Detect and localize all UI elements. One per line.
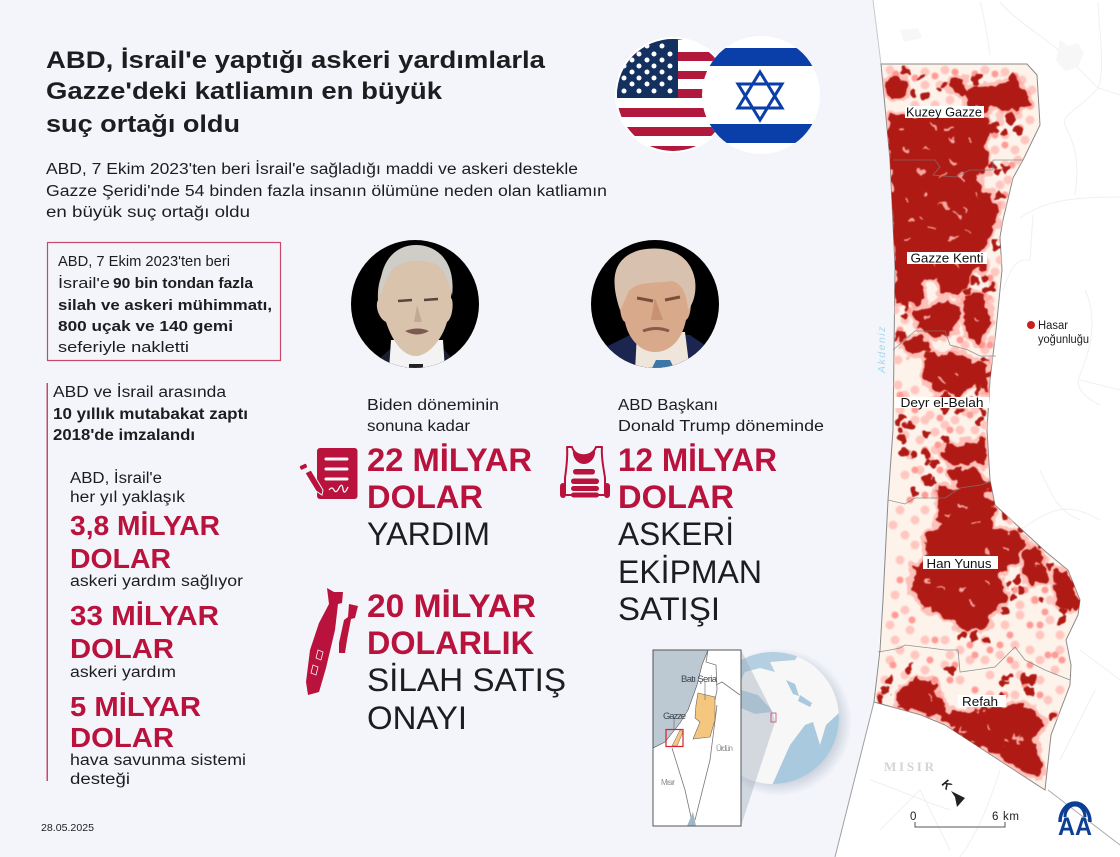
callout box: shipments: 90 bin tondan fazla bbox=[113, 275, 254, 292]
icon: bombs bbox=[306, 588, 358, 695]
locator: globe and inset map: Mısır bbox=[661, 778, 675, 787]
sales figure: 12 billion bbox=[618, 442, 777, 627]
annual aid: 3,8 MİLYAR bbox=[70, 510, 220, 541]
Trump caption bbox=[618, 397, 824, 435]
sales figure: 12 billion: EKİPMAN bbox=[618, 554, 762, 590]
sales figure: 20 billion: DOLARLIK bbox=[367, 625, 534, 661]
label: Akdeniz: Akdeniz bbox=[876, 325, 888, 374]
aid figure: 22 billion bbox=[367, 442, 532, 552]
sales figure: 12 billion: 12 MİLYAR bbox=[618, 442, 777, 478]
damage layer clipped to Gaza bbox=[880, 70, 1077, 774]
total aid bbox=[70, 600, 219, 681]
aid figure: 22 billion: YARDIM bbox=[367, 516, 490, 552]
callout box: shipments: İsrail'e bbox=[58, 274, 110, 292]
total aid: askeri yardım bbox=[70, 664, 176, 681]
locator: globe and inset map: Gazze bbox=[663, 711, 686, 722]
label: Refah: Refah bbox=[962, 695, 998, 709]
title bbox=[46, 47, 545, 138]
sales figure: 20 billion: ONAYI bbox=[367, 700, 467, 736]
Gaza on inset bbox=[672, 730, 683, 746]
locator: globe and inset map: Ürdün bbox=[716, 744, 733, 753]
Biden caption: Biden döneminin bbox=[367, 397, 499, 414]
label: Deyr el-Belah: Deyr el-Belah bbox=[900, 396, 984, 410]
label: Han Yunus: Han Yunus bbox=[926, 557, 992, 571]
annual aid: ABD, İsrail'e bbox=[70, 469, 162, 487]
title: Gazze'deki katliamın en büyük bbox=[46, 78, 442, 105]
locator: globe and inset map: Batı Şeria bbox=[681, 674, 718, 685]
intro paragraph: Gazze Şeridi'nde 54 binden fazla insanın ölümüne neden olan katliamın bbox=[46, 183, 607, 200]
memorandum text: 2018'de imzalandı bbox=[53, 427, 195, 444]
annual aid: DOLAR bbox=[70, 543, 171, 574]
air defence aid: 5 MİLYAR bbox=[70, 691, 201, 722]
callout box: shipments: ABD, 7 Ekim 2023'ten beri bbox=[58, 253, 230, 270]
Gaza marker bbox=[666, 730, 683, 746]
logo: AA: AA bbox=[1058, 813, 1092, 841]
damage halo bbox=[880, 72, 1077, 774]
annual aid: askeri yardım sağlıyor bbox=[70, 573, 243, 590]
title: suç ortağı oldu bbox=[46, 111, 240, 138]
total aid: 33 MİLYAR bbox=[70, 600, 219, 631]
sales figure: 20 billion bbox=[367, 588, 566, 736]
legend: damage density bbox=[1027, 320, 1089, 346]
sales figure: 12 billion: DOLAR bbox=[618, 479, 734, 515]
Trump column bbox=[560, 397, 824, 627]
label: Refah bbox=[958, 695, 1006, 709]
callout box: shipments: silah ve askeri mühimmatı, bbox=[58, 297, 272, 314]
label: Gazze Kenti: Gazze Kenti bbox=[910, 252, 984, 266]
memorandum text bbox=[53, 383, 248, 444]
view cone bbox=[741, 650, 775, 826]
damage dots: light bbox=[880, 70, 1062, 715]
sales figure: 20 billion: 20 MİLYAR bbox=[367, 588, 536, 624]
memorandum text: ABD ve İsrail arasında bbox=[53, 383, 226, 401]
map: damage density in Gaza bbox=[835, 0, 1120, 857]
Gaza strip outline bbox=[874, 64, 1080, 790]
annual aid: her yıl yaklaşık bbox=[70, 489, 185, 506]
damage clusters: dense bbox=[888, 80, 1075, 774]
flag: USA bbox=[615, 37, 716, 153]
aid figure: 22 billion: 22 MİLYAR bbox=[367, 442, 532, 478]
icon: signed document bbox=[299, 448, 358, 499]
annual aid bbox=[70, 469, 243, 590]
title: ABD, İsrail'e yaptığı askeri yardımlarla bbox=[46, 47, 545, 74]
air defence aid: desteği bbox=[70, 771, 130, 788]
West Bank bbox=[693, 693, 715, 739]
flag: Israel bbox=[700, 36, 822, 154]
total aid: DOLAR bbox=[70, 633, 174, 664]
Biden caption bbox=[367, 397, 499, 435]
Trump caption: ABD Başkanı bbox=[618, 397, 718, 414]
label: MISIR: MISIR bbox=[884, 759, 935, 774]
air defence aid bbox=[70, 691, 246, 788]
memorandum text: 10 yıllık mutabakat zaptı bbox=[53, 406, 248, 423]
date: 28.05.2025 bbox=[41, 822, 94, 834]
Trump caption: Donald Trump döneminde bbox=[618, 418, 824, 435]
scale bar bbox=[910, 811, 1019, 827]
locator: globe and inset map bbox=[653, 648, 852, 826]
air defence aid: hava savunma sistemi bbox=[70, 752, 246, 769]
globe marker bbox=[771, 713, 776, 722]
callout box: shipments bbox=[48, 242, 280, 360]
globe bbox=[742, 651, 849, 793]
portrait: Biden bbox=[351, 240, 479, 370]
Biden caption: sonuna kadar bbox=[367, 418, 470, 435]
callout box: shipments: seferiyle nakletti bbox=[58, 339, 189, 356]
legend: damage density: Hasar bbox=[1038, 320, 1068, 332]
scale bar: 0 bbox=[910, 811, 916, 823]
left column: memorandum and aid figures bbox=[46, 383, 248, 788]
label: Kuzey Gazze: Kuzey Gazze bbox=[906, 106, 982, 120]
Biden column bbox=[299, 397, 566, 736]
Mediterranean bbox=[653, 650, 708, 748]
air defence aid: DOLAR bbox=[70, 722, 174, 753]
callout box: shipments: 800 uçak ve 140 gemi bbox=[58, 318, 233, 335]
inset frame bbox=[653, 650, 741, 826]
north arrow: K bbox=[939, 777, 955, 793]
legend: damage density: yoğunluğu bbox=[1038, 334, 1089, 346]
flags bbox=[615, 36, 822, 155]
icon: bulletproof vest bbox=[560, 447, 610, 498]
intro paragraph: en büyük suç ortağı oldu bbox=[46, 204, 250, 221]
portrait: Trump bbox=[591, 240, 719, 372]
intro paragraph: ABD, 7 Ekim 2023'ten beri İsrail'e sağladığı maddi ve askeri destekle bbox=[46, 160, 578, 178]
sales figure: 12 billion: ASKERİ bbox=[618, 516, 734, 552]
intro paragraph bbox=[46, 160, 607, 221]
scale bar: 6 km bbox=[992, 811, 1019, 823]
north arrow bbox=[939, 777, 965, 807]
sales figure: 20 billion: SİLAH SATIŞ bbox=[367, 662, 566, 698]
sales figure: 12 billion: SATIŞI bbox=[618, 591, 720, 627]
aid figure: 22 billion: DOLAR bbox=[367, 479, 483, 515]
